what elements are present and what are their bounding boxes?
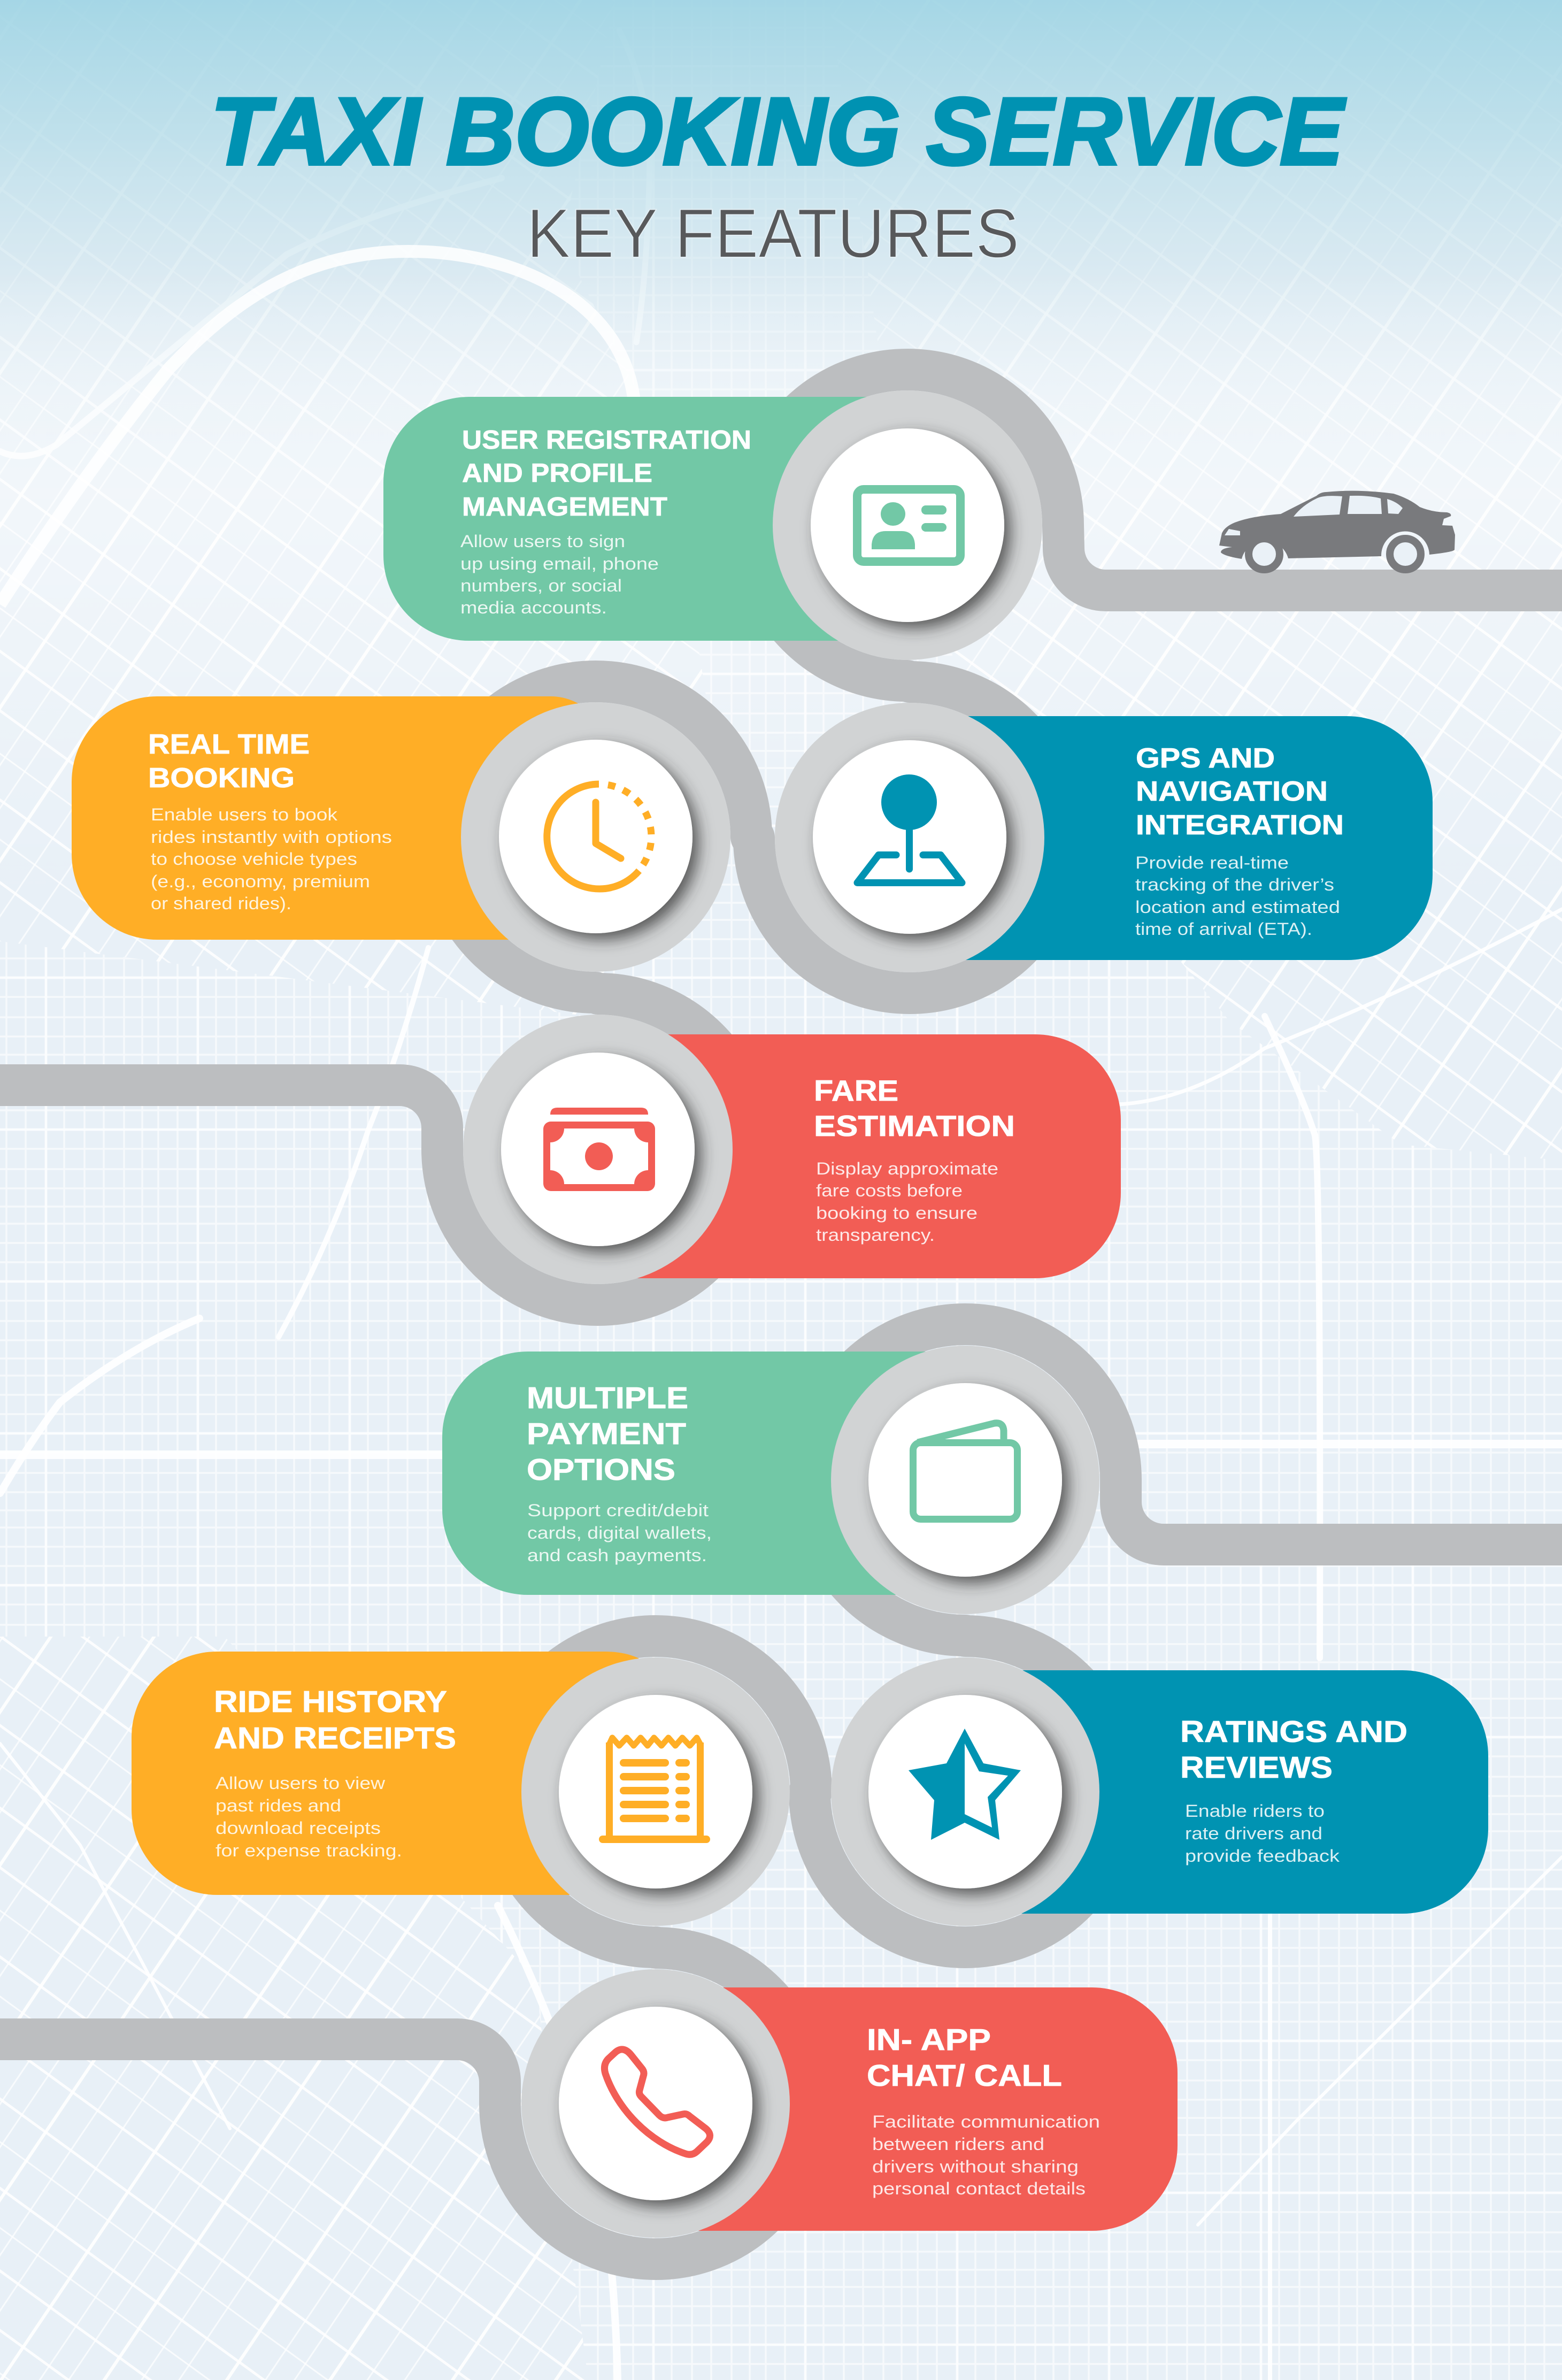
panel: fare estimation [463, 1015, 1121, 1284]
heading: USER REGISTRATION [462, 426, 751, 455]
description: transparency. [816, 1225, 935, 1245]
heading: OPTIONS [527, 1453, 675, 1487]
heading: MULTIPLE [527, 1381, 688, 1415]
pill [72, 696, 596, 940]
heading [867, 2023, 1062, 2093]
description: (e.g., economy, premium [151, 872, 370, 891]
description: location and estimated [1135, 897, 1340, 917]
pill [442, 1352, 965, 1595]
icon disc [868, 1383, 1062, 1577]
icon: banknote [543, 1108, 655, 1191]
heading: INTEGRATION [1136, 810, 1344, 841]
ring [773, 390, 1042, 660]
description: personal contact details [872, 2179, 1086, 2198]
road: lower route [0, 1324, 1562, 2259]
description [460, 532, 659, 617]
heading: REVIEWS [1180, 1751, 1333, 1785]
description: up using email, phone [460, 554, 659, 573]
panel: real time booking [72, 696, 730, 972]
description: time of arrival (ETA). [1135, 919, 1312, 939]
heading: ESTIMATION [814, 1109, 1015, 1142]
heading [214, 1685, 456, 1755]
icon: receipt [599, 1738, 710, 1843]
icon disc [499, 740, 692, 933]
description: rate drivers and [1185, 1824, 1322, 1843]
heading: RIDE HISTORY [214, 1685, 447, 1719]
heading: BOOKING [148, 763, 295, 794]
description: for expense tracking. [216, 1841, 402, 1860]
description: provide feedback [1185, 1846, 1340, 1865]
description: Allow users to sign [460, 532, 625, 551]
icon disc [501, 1053, 695, 1246]
title: TAXI BOOKING SERVICE [211, 78, 1346, 185]
description: numbers, or social [460, 576, 622, 595]
description: past rides and [216, 1796, 341, 1815]
heading: IN- APP [867, 2023, 991, 2057]
panel: gps and navigation integration [775, 703, 1433, 972]
heading [1136, 743, 1344, 841]
heading: RATINGS AND [1180, 1715, 1407, 1749]
pill [383, 397, 907, 641]
heading: FARE [814, 1074, 898, 1107]
description: to choose vehicle types [151, 849, 357, 869]
ring [521, 1657, 790, 1926]
description: booking to ensure [816, 1203, 978, 1223]
description [151, 805, 392, 913]
description [872, 2112, 1100, 2198]
description: Enable riders to [1185, 1801, 1325, 1821]
subtitle: KEY FEATURES [527, 194, 1019, 272]
heading: AND PROFILE [462, 459, 652, 488]
ring [831, 1346, 1099, 1614]
description: between riders and [872, 2135, 1044, 2154]
description: media accounts. [460, 598, 607, 617]
description: Provide real-time [1135, 853, 1289, 872]
icon: id card [857, 489, 960, 562]
description: Allow users to view [216, 1774, 386, 1793]
heading: CHAT/ CALL [867, 2059, 1062, 2093]
icon disc [559, 2007, 752, 2200]
panel: multiple payment options [442, 1346, 1099, 1614]
icon: map pin [857, 774, 962, 882]
heading [148, 729, 310, 794]
description [216, 1774, 402, 1860]
heading: REAL TIME [148, 729, 310, 760]
icon: wallet [913, 1423, 1017, 1519]
road: upper route [0, 370, 1562, 1305]
description: Facilitate communication [872, 2112, 1100, 2131]
description: Enable users to book [151, 805, 338, 824]
icon disc [813, 740, 1006, 934]
heading: GPS AND [1136, 743, 1275, 774]
description: fare costs before [816, 1181, 963, 1200]
pill [965, 1670, 1488, 1914]
pill [132, 1652, 656, 1895]
ring [521, 1969, 790, 2238]
description: Display approximate [816, 1159, 998, 1178]
description: cards, digital wallets, [527, 1523, 712, 1542]
ring [461, 702, 730, 972]
heading: MANAGEMENT [462, 493, 667, 521]
pill [656, 1987, 1178, 2231]
description [527, 1501, 712, 1565]
description: drivers without sharing [872, 2157, 1079, 2176]
description [1135, 853, 1340, 939]
pill [598, 1034, 1121, 1278]
ring [831, 1657, 1099, 1926]
icon disc [559, 1695, 752, 1888]
panel: ride history and receipts [132, 1652, 790, 1926]
description: tracking of the driver’s [1135, 875, 1334, 894]
heading: NAVIGATION [1136, 776, 1328, 807]
description: and cash payments. [527, 1546, 707, 1565]
icon: clock [547, 784, 651, 889]
description: download receipts [216, 1818, 381, 1838]
heading [814, 1074, 1015, 1142]
icon: half star [909, 1729, 1021, 1840]
description: rides instantly with options [151, 827, 392, 847]
description [816, 1159, 998, 1245]
panel: in-app chat and call [521, 1969, 1178, 2238]
description: Support credit/debit [527, 1501, 709, 1520]
panel: user registration and profile management [383, 390, 1042, 660]
icon: car [1219, 491, 1455, 570]
pill [910, 716, 1433, 960]
heading [527, 1381, 688, 1487]
icon: phone [604, 2049, 710, 2154]
icon disc [811, 428, 1004, 622]
panel: ratings and reviews [831, 1657, 1488, 1926]
heading [462, 426, 751, 521]
ring [775, 703, 1044, 972]
heading [1180, 1715, 1407, 1785]
description: or shared rides). [151, 894, 291, 913]
heading: AND RECEIPTS [214, 1721, 456, 1755]
ring [463, 1015, 733, 1284]
heading: PAYMENT [527, 1417, 686, 1451]
icon disc [868, 1695, 1062, 1888]
description [1185, 1801, 1340, 1865]
